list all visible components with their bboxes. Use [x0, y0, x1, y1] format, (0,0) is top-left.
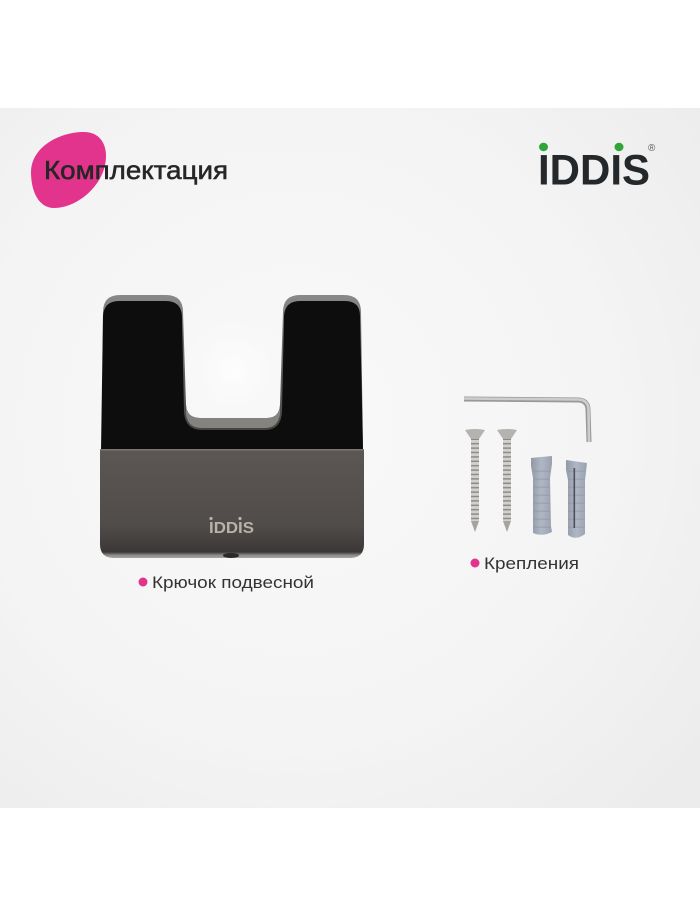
wall plug 2: [566, 460, 587, 538]
title text: Комплектация: [44, 155, 228, 185]
pink bullet: [138, 578, 148, 586]
screw 1: [465, 429, 485, 532]
label: hook: [138, 573, 314, 592]
inner notch highlight: [186, 405, 280, 428]
screw 2: [497, 429, 517, 532]
soft light glow behind hook: [143, 280, 323, 460]
label text: Крючок подвесной: [152, 573, 314, 592]
hardware: fasteners: [464, 398, 589, 538]
logo green dots: [539, 143, 624, 151]
brand logo top right: [538, 143, 656, 194]
hook black upper body: [101, 301, 363, 451]
hook logo wordmark: IDDIS: [209, 520, 254, 537]
product: wall hook: [100, 295, 364, 558]
registered mark: ®: [648, 143, 656, 154]
hook lower plate: [100, 449, 364, 558]
hook upper rim: [102, 295, 363, 451]
heading: pink blob and title: [31, 132, 228, 208]
hex key: [464, 398, 589, 442]
wall plug 1: [531, 456, 552, 535]
label: fasteners: [470, 554, 579, 573]
background panel: [0, 108, 700, 808]
pink blob: [31, 132, 106, 208]
pink bullet: [470, 558, 480, 568]
hook logo dots: [209, 517, 242, 520]
plate top edge: [100, 449, 364, 450]
screw hole: [223, 553, 239, 558]
hook logo: [209, 517, 254, 537]
label text: Крепления: [484, 554, 579, 573]
logo wordmark: IDDIS: [538, 146, 650, 194]
